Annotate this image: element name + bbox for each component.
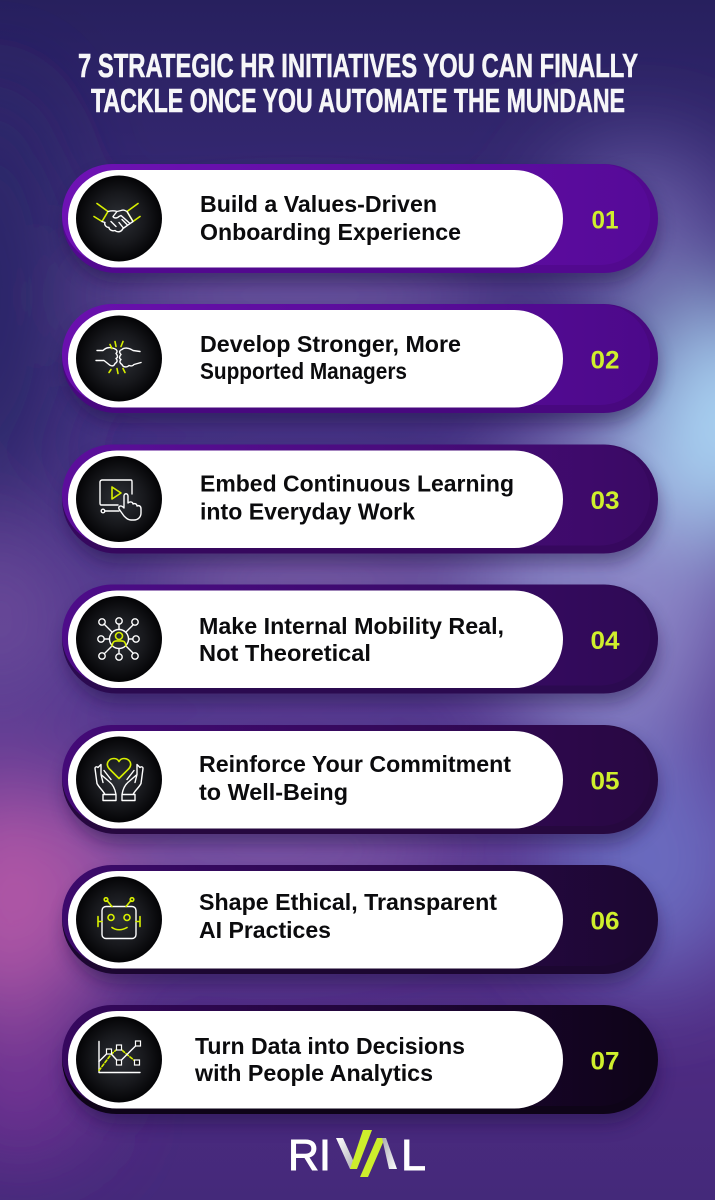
step number: 07 (590, 1048, 620, 1076)
step heading (199, 613, 504, 666)
logo: Rival: L (401, 1131, 426, 1180)
panel: initiative 2 (62, 304, 658, 423)
step number: 06 (590, 908, 620, 936)
step number: 01 (592, 206, 619, 234)
step heading: Shape Ethical, Transparent (199, 889, 497, 915)
icon: analytics chart (99, 1041, 140, 1072)
step heading: Embed Continuous Learning (200, 470, 514, 496)
panel: initiative 4 (62, 584, 658, 704)
step number: 03 (590, 487, 620, 515)
step number: 02 (590, 346, 620, 374)
step heading: Make Internal Mobility Real, (199, 613, 504, 639)
icon: video touch (100, 480, 141, 520)
step heading (194, 1033, 465, 1086)
step heading (199, 751, 511, 805)
step heading: AI Practices (199, 917, 331, 943)
title (78, 47, 638, 119)
step heading (200, 331, 461, 384)
step number: 05 (590, 768, 620, 796)
logo: Rival: RI (288, 1131, 331, 1180)
icon: hands holding heart (95, 758, 143, 800)
step heading: to Well-Being (199, 779, 348, 805)
step heading (199, 889, 497, 943)
step heading (200, 470, 514, 524)
icon: people network (98, 618, 139, 660)
step heading: with People Analytics (194, 1060, 433, 1086)
step number: 04 (590, 627, 620, 655)
step heading: Not Theoretical (199, 640, 371, 666)
icon: handshake (94, 204, 140, 232)
panel: initiative 3 (62, 444, 658, 564)
panel: initiative 7 (62, 1005, 658, 1124)
icon: fist bump (96, 342, 141, 374)
step heading: Reinforce Your Commitment (199, 751, 511, 777)
step heading: Onboarding Experience (200, 219, 461, 245)
step heading: Turn Data into Decisions (195, 1033, 465, 1059)
step heading: Build a Values-Driven (200, 191, 437, 217)
panel: initiative 1 (62, 164, 658, 283)
panel: initiative 6 (62, 865, 658, 984)
step heading: into Everyday Work (200, 498, 415, 524)
step heading (200, 191, 461, 245)
step heading: Develop Stronger, More (200, 331, 461, 357)
step heading: Supported Managers (200, 358, 407, 384)
icon: robot (98, 898, 140, 938)
panel: initiative 5 (62, 725, 658, 844)
logo: Rival (288, 1130, 426, 1180)
